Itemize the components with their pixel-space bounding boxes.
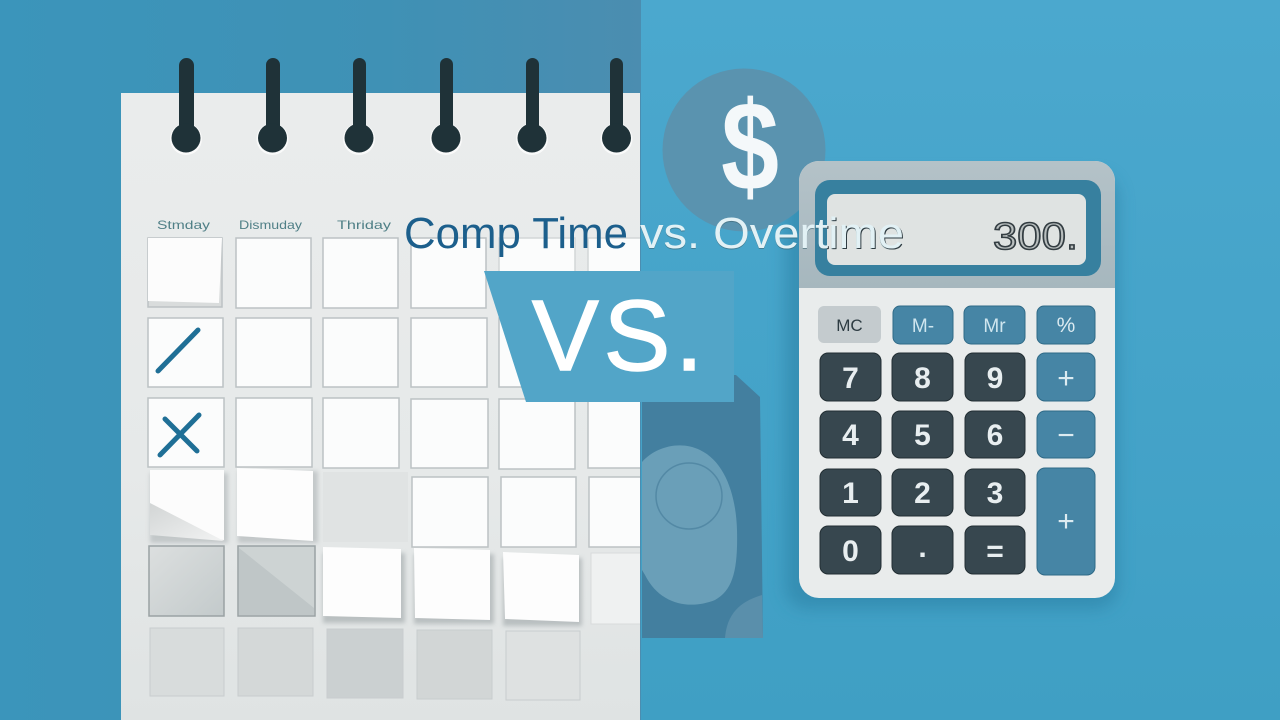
icon: dollar coin: $ [721,75,779,217]
panel: calendar [121,58,649,720]
icon: dollar coin [662,68,826,232]
icon: slash mark [158,330,198,371]
calculator body [799,161,1115,598]
calendar binding rings [170,58,632,155]
number key labels: 3 [987,477,1003,510]
title [406,216,903,257]
memory keys: M- [912,316,934,337]
calculator shadow [785,175,1118,609]
corner circle [725,595,763,638]
display [815,180,1101,276]
blob illustration [642,445,737,605]
operator keys: + [1057,505,1075,538]
title: vs. Overtime [640,210,904,259]
faded bottom row cells [150,628,580,700]
VS badge [484,271,734,402]
number key labels: . [918,531,927,564]
number key labels: 8 [914,362,931,395]
number key labels: 2 [914,477,931,510]
lifted cells with folds and shadows [149,468,649,626]
weekday labels: Thriday [337,218,391,232]
number key labels [842,362,1004,568]
title: vs. Overtime [640,209,904,258]
panel: calculator [799,161,1115,598]
number keys [820,353,1025,574]
number key labels: = [986,535,1004,568]
display: 300. [993,216,1078,258]
operator keys: − [1057,419,1075,452]
icon: cross mark [160,415,199,455]
memory keys: % [1057,314,1075,337]
circle outline [656,463,722,529]
panel: dark receipt shape [642,375,763,638]
memory keys: MC [836,316,863,335]
number key labels: 7 [842,362,859,395]
number key labels: 4 [842,419,859,452]
number key labels: 9 [987,362,1003,395]
memory keys: Mr [983,316,1006,337]
number key labels: 6 [987,419,1003,452]
title: Comp Time [404,209,628,258]
weekday labels [157,218,391,232]
number key labels: 5 [914,419,931,452]
calendar day cells [148,238,649,547]
operator keys [1037,353,1095,575]
calendar sheet [121,93,640,720]
memory keys [818,306,1095,344]
background: right half [641,0,1280,720]
background: left half [0,0,641,720]
VS badge: VS. [532,280,703,392]
operator keys: + [1057,362,1075,395]
weekday labels: Dismuday [239,218,302,232]
title: vs. Overtime [641,210,905,259]
weekday labels: Stmday [157,218,210,232]
number key labels: 1 [842,477,859,510]
number key labels: 0 [842,535,859,568]
